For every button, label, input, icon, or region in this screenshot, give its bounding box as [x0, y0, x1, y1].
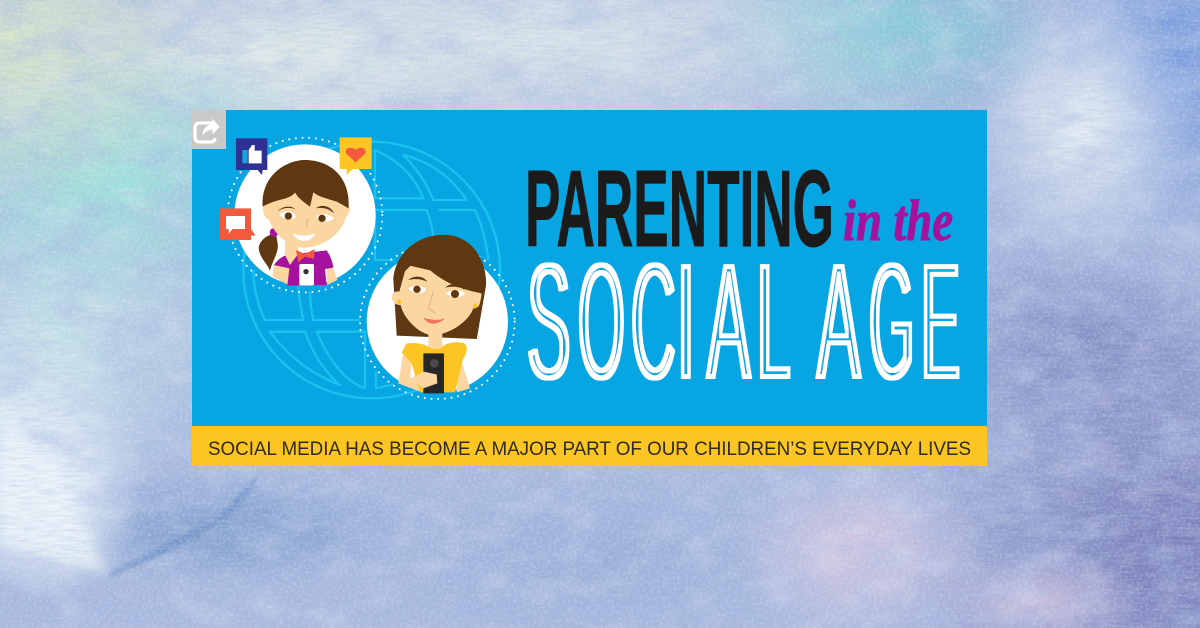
white circle: mother [367, 251, 508, 392]
icon: chat [219, 208, 256, 240]
shirt: girl [274, 250, 333, 286]
tagline band [192, 426, 987, 466]
white circle: girl [234, 144, 376, 286]
title: SOCIAL AGE: G [869, 228, 914, 415]
nose: mother [428, 292, 435, 313]
share button [192, 110, 226, 149]
phone: mother [423, 353, 444, 393]
arms: mother [398, 352, 470, 392]
title: SOCIAL AGE: S [527, 227, 570, 415]
title: in the: in the [843, 188, 953, 253]
eyes: mother [408, 277, 465, 298]
face: mother [392, 265, 482, 335]
nose: girl [305, 218, 309, 228]
title: SOCIAL AGE: I [677, 228, 695, 415]
ponytail [259, 233, 278, 271]
hair back [393, 235, 486, 339]
tagline text: SOCIAL MEDIA HAS BECOME A MAJOR PART OF OUR CHILDREN’S EVERYDAY LIVES [208, 438, 971, 460]
collar bow [296, 249, 315, 262]
character: mother with phone [360, 235, 515, 399]
hair tie [270, 228, 278, 237]
title: SOCIAL AGE: C [631, 228, 676, 415]
title: SOCIAL AGE: O [578, 227, 625, 415]
title: SOCIAL AGE: A [817, 227, 861, 415]
banner panel [192, 110, 987, 426]
title: SOCIAL AGE: L [757, 227, 790, 415]
neck [428, 328, 442, 352]
character: girl with phone [219, 137, 382, 292]
lips [423, 318, 445, 324]
face: girl [263, 188, 350, 248]
dotted ring: girl [228, 138, 382, 292]
hair: girl [263, 160, 349, 208]
hair side right [457, 285, 486, 339]
raised hand [285, 242, 298, 265]
smile [293, 233, 315, 241]
title: SOCIAL AGE [527, 227, 960, 415]
hand: mother [412, 372, 437, 388]
title: SOCIAL AGE: A [707, 227, 751, 415]
globe outline [243, 142, 500, 398]
dotted ring: mother [360, 244, 515, 399]
icon: heart [340, 137, 372, 175]
icon: thumbs up [236, 138, 267, 175]
arms: girl [273, 260, 337, 285]
title: SOCIAL AGE: E [921, 228, 960, 415]
phone: girl [299, 264, 314, 285]
dress [402, 342, 467, 392]
text: PARENTING [525, 148, 834, 270]
eyes: girl [277, 206, 334, 222]
hair fringe [393, 235, 486, 293]
earrings [397, 299, 477, 308]
